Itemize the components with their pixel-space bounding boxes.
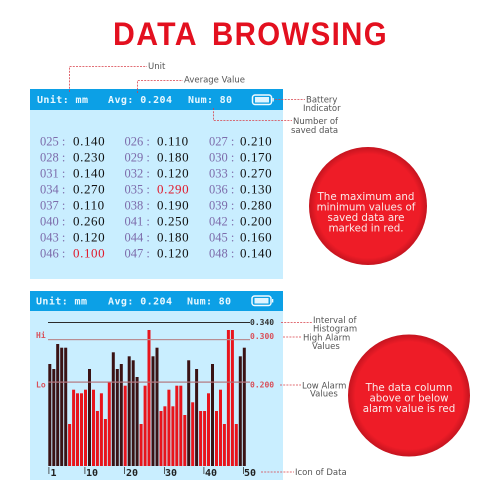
data readings: 0.170: [240, 150, 272, 164]
data readings: [40, 134, 272, 260]
x axis labels: 40: [205, 468, 217, 479]
header bar: Num: 80: [188, 95, 232, 106]
data readings: 0.290: [157, 182, 189, 196]
data readings: 028 :: [40, 150, 65, 164]
data readings: 040 :: [40, 214, 65, 228]
callout circle: alarm column: [348, 334, 470, 456]
callout: number of saved data: Number of: [293, 117, 339, 127]
callout: high alarm values: Values: [312, 342, 340, 352]
header bar: Num: 80: [187, 296, 231, 308]
callout: unit: Unit: [148, 62, 166, 72]
data readings: 027 :: [209, 134, 234, 148]
callout: number of saved data: saved data: [291, 126, 338, 136]
panel: histogram: [30, 291, 283, 480]
data readings: 0.140: [73, 166, 105, 180]
data readings: 047 :: [124, 246, 150, 260]
callout circle: max and min: minimum values of: [317, 202, 416, 214]
data readings: 036 :: [209, 182, 234, 196]
data readings: 0.120: [73, 230, 105, 244]
callout: number of saved data: [214, 108, 339, 136]
data readings: 048 :: [209, 246, 234, 260]
x axis labels: 50: [244, 468, 256, 479]
scale line: high alarm: 0.300: [250, 332, 274, 341]
data readings: 026 :: [124, 134, 150, 148]
x axis labels: 20: [126, 468, 138, 479]
scale line: high alarm: Hi: [36, 330, 46, 340]
callout circle: max and min: The maximum and: [317, 191, 414, 203]
data readings: 0.190: [157, 198, 189, 212]
data readings: 0.180: [157, 230, 189, 244]
callout: battery indicator: Battery: [306, 96, 337, 106]
title: BROWSING: [212, 16, 388, 52]
scale line: high alarm: [36, 330, 274, 341]
callout: average value: [138, 76, 245, 93]
data readings: 0.140: [240, 246, 272, 260]
data readings: 0.280: [240, 198, 272, 212]
header bar: [30, 89, 283, 110]
x axis labels: 30: [165, 468, 177, 479]
callout: interval of histogram: [281, 316, 357, 334]
header bar: Unit: mm: [37, 94, 88, 106]
callout circle: max and min: [309, 147, 427, 265]
data readings: 031 :: [40, 166, 65, 180]
data readings: 0.100: [73, 246, 105, 260]
callout circle: alarm column: The data column: [365, 382, 452, 394]
data readings: 045 :: [209, 230, 234, 244]
callout: battery indicator: Indicator: [303, 104, 341, 114]
data readings: 0.120: [157, 246, 189, 260]
header bar: [30, 291, 283, 311]
x axis labels: 10: [86, 468, 98, 479]
callout: low alarm values: [280, 382, 346, 400]
data readings: 032 :: [124, 166, 150, 180]
callout: interval of histogram: Histogram: [313, 324, 357, 334]
callout: high alarm values: High Alarm: [303, 334, 350, 344]
panel: saved data table: [30, 89, 283, 279]
data readings: 042 :: [209, 214, 234, 228]
callout circle: max and min: marked in red.: [328, 222, 404, 234]
data readings: 046 :: [40, 246, 65, 260]
data readings: 025 :: [40, 134, 65, 148]
callout: low alarm values: Values: [310, 390, 338, 400]
scale line: interval: 0.340: [250, 318, 274, 327]
callout: icon of data: [261, 468, 347, 478]
callout circle: alarm column: above or below: [369, 392, 449, 404]
data readings: 0.260: [73, 214, 105, 228]
data readings: 0.110: [73, 198, 105, 212]
data readings: 030 :: [209, 150, 234, 164]
scale line: low alarm: Lo: [36, 380, 46, 390]
data readings: 0.210: [240, 134, 272, 148]
callout: low alarm values: Low Alarm: [302, 382, 346, 392]
x axis labels: 1: [50, 468, 57, 479]
data readings: 0.120: [157, 166, 189, 180]
data readings: 0.180: [157, 150, 189, 164]
header bar: Avg: 0.204: [108, 296, 172, 308]
callout: unit: [70, 62, 166, 92]
title: DATA: [113, 16, 198, 52]
callout: high alarm values: [283, 334, 350, 352]
data readings: 0.160: [240, 230, 272, 244]
icon: battery: [252, 95, 274, 104]
data readings: 0.110: [157, 134, 189, 148]
title: [113, 16, 388, 52]
data readings: 038 :: [124, 198, 150, 212]
callout: battery indicator: [275, 96, 341, 114]
callout circle: max and min: saved data are: [327, 212, 405, 224]
data readings: 043 :: [40, 230, 65, 244]
data readings: 0.270: [240, 166, 272, 180]
header bar: Unit: mm: [36, 296, 87, 308]
data readings: 041 :: [124, 214, 150, 228]
data readings: 0.230: [73, 150, 105, 164]
data readings: 039 :: [209, 198, 234, 212]
x axis labels: [48, 467, 256, 479]
data readings: 0.200: [240, 214, 272, 228]
data readings: 037 :: [40, 198, 65, 212]
callout: interval of histogram: Interval of: [313, 316, 357, 326]
scale line: low alarm: 0.200: [250, 380, 274, 390]
data readings: 035 :: [124, 182, 150, 196]
data readings: 0.250: [157, 214, 189, 228]
header bar: Avg: 0.204: [108, 95, 172, 106]
data readings: 033 :: [209, 166, 234, 180]
data readings: 034 :: [40, 182, 65, 196]
data readings: 0.140: [73, 134, 105, 148]
icon: battery: [252, 296, 273, 306]
callout: icon of data: Icon of Data: [295, 468, 347, 478]
data readings: 044 :: [124, 230, 150, 244]
callout circle: alarm column: alarm value is red: [363, 403, 455, 415]
scale line: low alarm: [36, 380, 274, 390]
bar chart: [48, 330, 246, 466]
data readings: 029 :: [124, 150, 150, 164]
data readings: 0.270: [73, 182, 105, 196]
callout: average value: Average Value: [184, 76, 245, 86]
data readings: 0.130: [240, 182, 272, 196]
